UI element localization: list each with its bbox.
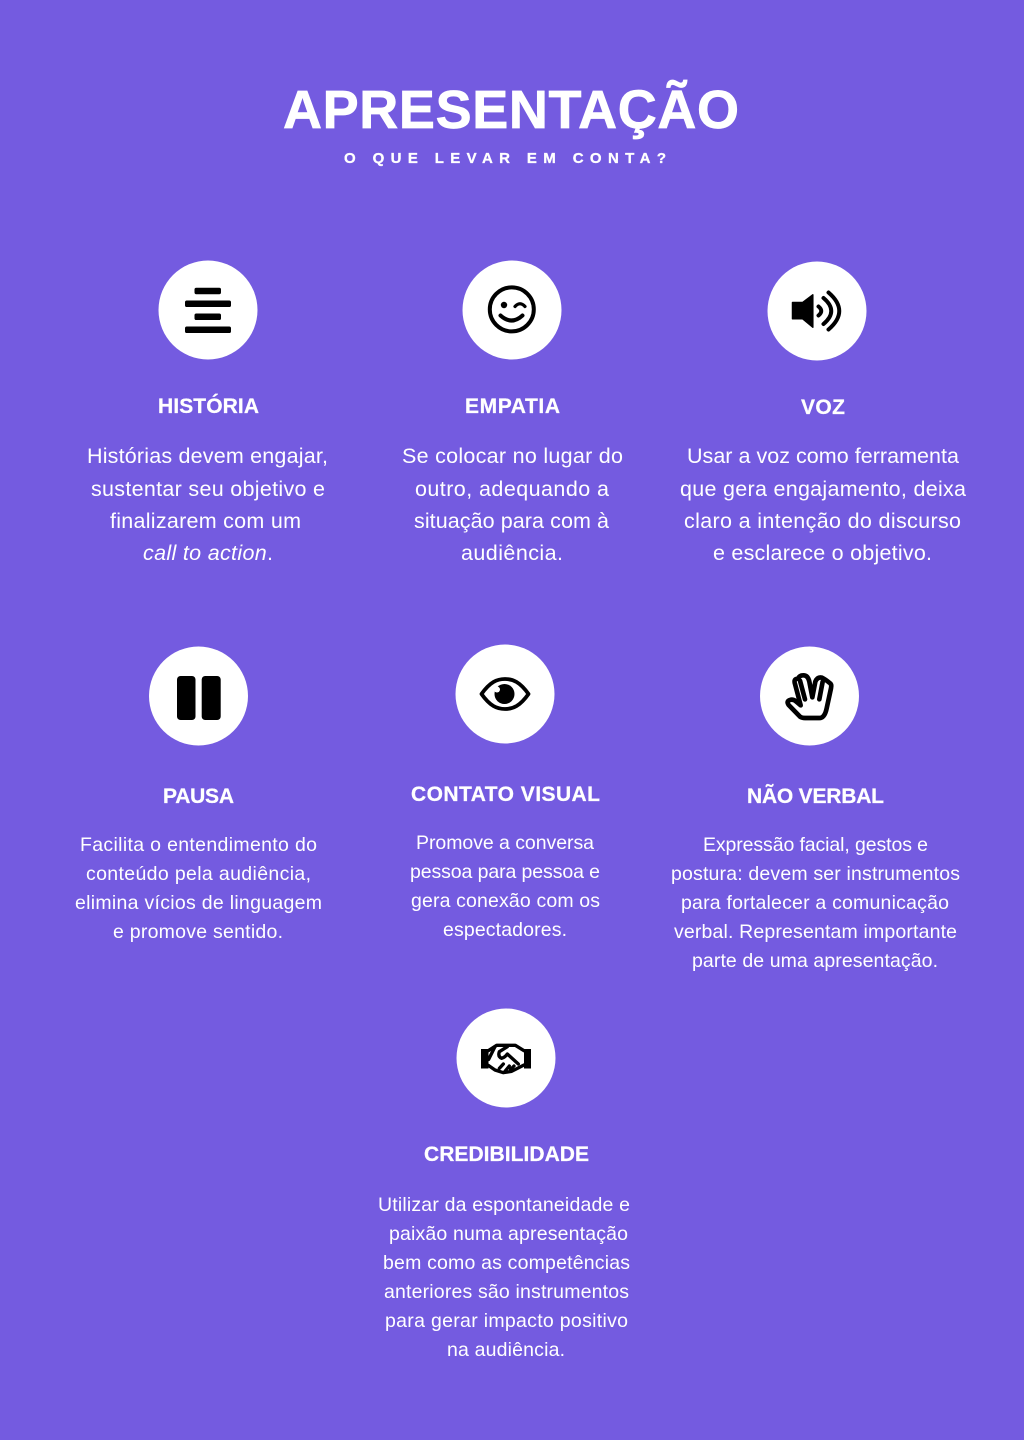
- text: história: call to action.: [143, 541, 273, 565]
- text: voz: e esclarece o objetivo.: [713, 541, 932, 565]
- text: não verbal: [671, 834, 960, 972]
- text: história: finalizarem com um: [110, 509, 301, 533]
- text: contato visual: gera conexão com os: [411, 890, 600, 912]
- text: credibilidade: anteriores são instrumentos: [384, 1281, 629, 1303]
- heading: pausa: PAUSA: [163, 785, 234, 808]
- heading: credibilidade: CREDIBILIDADE: [424, 1143, 589, 1166]
- subtitle: O QUE LEVAR EM CONTA?: [344, 150, 666, 167]
- text: história: sustentar seu objetivo e: [91, 477, 325, 501]
- text: não verbal: verbal. Representam importante: [674, 921, 957, 943]
- panel: contato visual: [410, 644, 600, 941]
- panel: empatia: [402, 260, 623, 565]
- text: não verbal: para fortalecer a comunicação: [681, 892, 949, 914]
- heading: não verbal: NÃO VERBAL: [747, 785, 884, 808]
- text: credibilidade: Utilizar da espontaneidade e: [378, 1194, 630, 1216]
- text: voz: Usar a voz como ferramenta: [687, 444, 959, 468]
- heading: história: HISTÓRIA: [158, 394, 259, 418]
- text: credibilidade: na audiência.: [447, 1339, 565, 1361]
- text: pausa: Facilita o entendimento do: [80, 834, 317, 856]
- text: contato visual: Promove a conversa: [416, 832, 594, 854]
- text: contato visual: [410, 832, 600, 941]
- text: história: Histórias devem engajar,: [87, 444, 328, 468]
- text: não verbal: parte de uma apresentação.: [692, 950, 938, 972]
- icon: eye: [456, 644, 554, 744]
- heading: empatia: EMPATIA: [465, 395, 560, 418]
- text: empatia: [402, 444, 623, 565]
- panel: credibilidade: [378, 1008, 630, 1361]
- icon: hand: [760, 646, 859, 746]
- text: pausa: [75, 834, 322, 943]
- icon: pause: [149, 646, 248, 746]
- panel: voz: [680, 262, 966, 565]
- text: pausa: conteúdo pela audiência,: [86, 863, 311, 885]
- text: voz: claro a intenção do discurso: [684, 509, 961, 533]
- text: empatia: Se colocar no lugar do: [402, 444, 623, 468]
- text: empatia: situação para com à: [414, 509, 609, 533]
- panel: não verbal: [671, 646, 960, 972]
- text: não verbal: Expressão facial, gestos e: [703, 834, 928, 856]
- text: credibilidade: para gerar impacto positivo: [385, 1310, 628, 1332]
- icon: handshake: [456, 1008, 556, 1108]
- text: credibilidade: [378, 1194, 630, 1361]
- panel: pausa: [75, 646, 322, 943]
- heading: voz: VOZ: [801, 396, 845, 419]
- text: empatia: outro, adequando a: [415, 477, 609, 501]
- text: pausa: e promove sentido.: [113, 921, 283, 943]
- panel: história: [87, 260, 328, 565]
- heading: contato visual: CONTATO VISUAL: [411, 783, 600, 806]
- text: pausa: elimina vícios de linguagem: [75, 892, 322, 914]
- icon: centered text lines: [158, 260, 258, 360]
- title: APRESENTAÇÃO: [283, 80, 739, 140]
- icon: winking face: [462, 260, 562, 360]
- text: não verbal: postura: devem ser instrumentos: [671, 863, 960, 885]
- icon: speaker: [768, 262, 866, 360]
- text: contato visual: espectadores.: [443, 919, 567, 941]
- text: credibilidade: bem como as competências: [383, 1252, 630, 1274]
- text: credibilidade: paixão numa apresentação: [389, 1223, 628, 1245]
- text: contato visual: pessoa para pessoa e: [410, 861, 600, 883]
- text: história: [87, 444, 328, 565]
- text: empatia: audiência.: [461, 541, 563, 565]
- text: voz: que gera engajamento, deixa: [680, 477, 966, 501]
- text: voz: [680, 444, 966, 565]
